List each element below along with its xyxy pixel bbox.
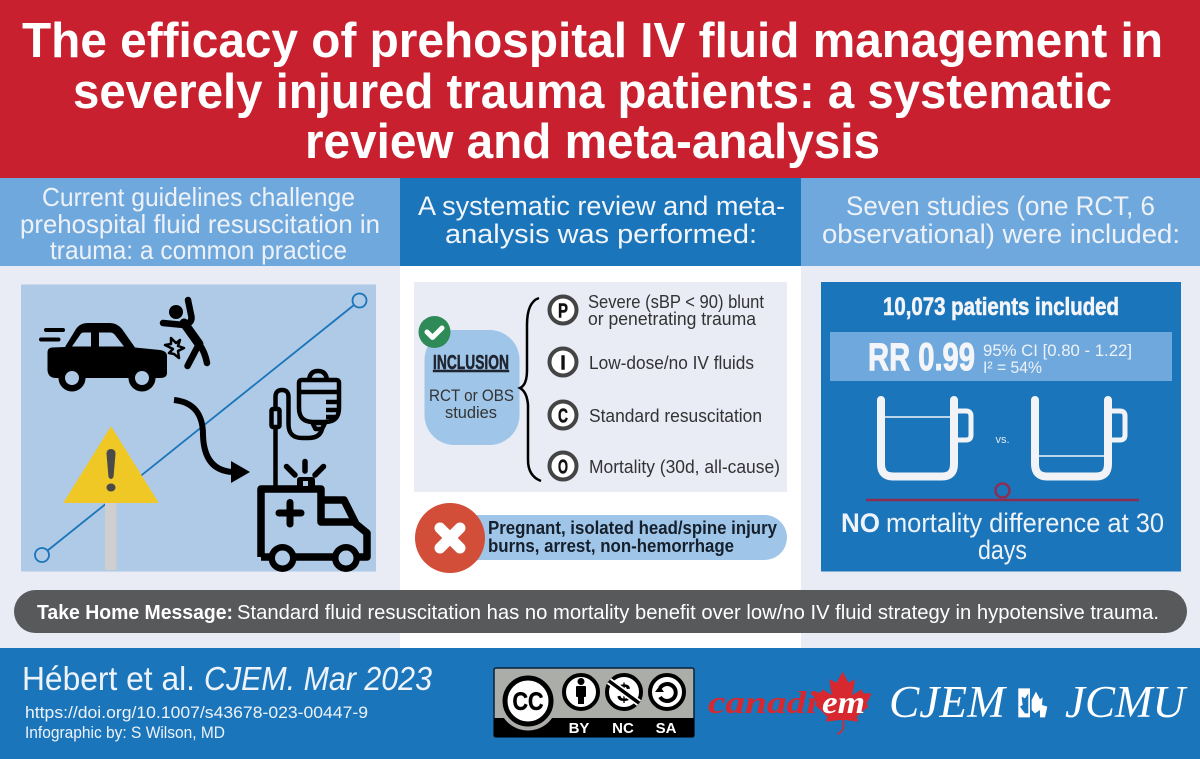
results conclusion: mortality difference at 30 <box>886 508 1164 538</box>
icon: balance point <box>866 484 1139 500</box>
risk ratio band <box>830 332 1172 381</box>
PICO: outcome: O <box>558 456 568 478</box>
citation: https://doi.org/10.1007/s43678-023-00447-9 <box>25 703 368 722</box>
column heading: studies <box>801 178 1200 266</box>
exclusion criteria: burns, arrest, non-hemorrhage <box>488 536 734 556</box>
citation: Hébert et al. <box>22 660 195 697</box>
risk ratio band: 95% CI [0.80 - 1.22] <box>983 342 1132 360</box>
PICO: outcome: Mortality (30d, all-cause) <box>589 456 780 477</box>
Creative Commons badge <box>494 668 694 737</box>
results heading: 10,073 patients included <box>883 293 1119 321</box>
diagonal trend line <box>35 294 366 562</box>
icon: check mark <box>418 316 450 348</box>
Creative Commons badge: CC <box>512 688 544 716</box>
take home message: Take Home Message: <box>37 602 233 624</box>
risk ratio band: I² = 54% <box>983 359 1042 377</box>
icon: low cup <box>1035 400 1125 476</box>
icon: warning sign <box>65 428 157 570</box>
PICO: population: P <box>558 300 568 322</box>
results conclusion: NO <box>841 508 880 538</box>
Creative Commons badge: BY <box>569 720 589 737</box>
column heading: methods <box>400 178 801 266</box>
citation: CJEM. Mar 2023 <box>204 660 433 697</box>
CJEM JCMU logo: CJEM <box>889 677 1008 727</box>
PICO: population: Severe (sBP < 90) blunt <box>588 291 764 312</box>
title banner: The efficacy of prehospital IV fluid management in <box>22 14 1163 68</box>
curly brace <box>520 298 541 481</box>
PICO: intervention: Low-dose/no IV fluids <box>589 352 754 373</box>
column heading: studies: Seven studies (one RCT, 6 <box>846 191 1155 221</box>
CanadiEM logo <box>708 672 872 734</box>
inclusion box: INCLUSION <box>433 352 509 374</box>
panel: results <box>821 282 1181 572</box>
icon: struck pedestrian <box>163 300 207 366</box>
results conclusion: days <box>978 535 1027 565</box>
results conclusion <box>841 508 1164 565</box>
PICO: population <box>550 291 764 329</box>
panel: PICO criteria <box>414 282 787 492</box>
title banner <box>0 0 1200 178</box>
risk ratio band: RR 0.99 <box>868 336 975 379</box>
column heading: studies: observational) were included: <box>822 219 1180 249</box>
inclusion box: RCT or OBS <box>429 386 514 405</box>
PICO: intervention <box>550 348 754 376</box>
title banner: review and meta-analysis <box>305 115 880 169</box>
citation: Infographic by: S Wilson, MD <box>25 724 225 742</box>
icon: exclusion cross <box>415 503 485 573</box>
CJEM JCMU logo: JCMU <box>1065 677 1187 727</box>
Creative Commons badge: SA <box>656 720 677 737</box>
Creative Commons badge: NC <box>612 720 634 737</box>
column heading: methods: A systematic review and meta- <box>418 191 785 221</box>
PICO: outcome <box>550 452 780 480</box>
arrow <box>174 400 250 483</box>
take home message: Standard fluid resuscitation has no mortality benefit over low/no IV fluid strategy in hypotensive trauma. <box>237 602 1159 624</box>
Creative Commons badge: $ <box>617 679 631 707</box>
column heading: guidelines: prehospital fluid resuscitation in <box>20 209 380 239</box>
column heading: guidelines: Current guidelines challenge <box>42 182 355 212</box>
column heading: guidelines <box>0 178 400 266</box>
PICO: comparison <box>550 402 762 428</box>
inclusion box <box>424 330 520 445</box>
icon: ambulance <box>261 462 367 572</box>
icon: full cup <box>881 400 971 476</box>
panel: trauma scene illustration <box>21 284 376 572</box>
CanadiEM logo: em <box>822 684 865 720</box>
citation <box>22 660 433 742</box>
icon: car <box>41 323 167 392</box>
CanadiEM logo: canadi <box>708 684 817 720</box>
PICO: comparison: C <box>558 406 568 428</box>
CJEM JCMU logo <box>889 677 1187 727</box>
PICO: intervention: I <box>560 352 566 374</box>
column heading: guidelines: trauma: a common practice <box>50 235 347 265</box>
PICO: population: or penetrating trauma <box>588 308 757 329</box>
title banner: severely injured trauma patients: a systematic <box>73 65 1112 119</box>
exclusion criteria: Pregnant, isolated head/spine injury <box>488 518 777 538</box>
take home message <box>14 590 1187 633</box>
exclusion criteria <box>415 503 787 573</box>
vs label: vs. <box>995 434 1010 446</box>
icon: IV bag <box>272 371 339 488</box>
column heading: methods: analysis was performed: <box>445 219 757 249</box>
footer <box>0 648 1200 759</box>
PICO: comparison: Standard resuscitation <box>589 405 762 426</box>
inclusion box: studies <box>445 403 497 422</box>
